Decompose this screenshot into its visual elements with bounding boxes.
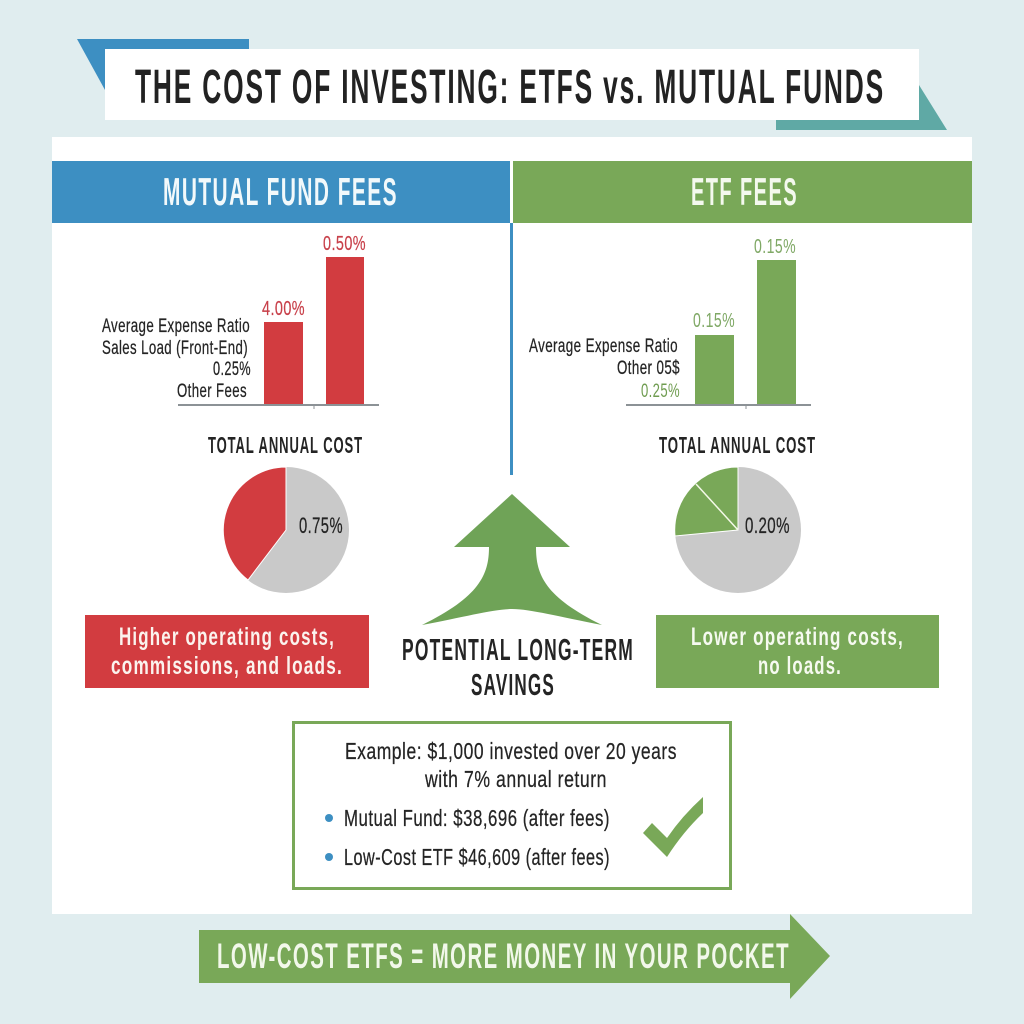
panel: etf fees column	[513, 161, 972, 688]
text: potential long-term savings: POTENTIAL LONG-TERM	[402, 632, 634, 667]
heading: etf fees: ETF FEES	[691, 171, 798, 214]
bottom arrow banner	[199, 914, 830, 999]
bar chart: mutual fund: Sales Load (Front-End)	[102, 338, 248, 359]
panel: example	[294, 722, 730, 888]
bar chart: etf: 0.15%	[754, 236, 796, 258]
pie chart: etf	[675, 467, 801, 593]
panel: example: with 7% annual return	[424, 766, 607, 792]
bar chart: etf: Average Expense Ratio	[529, 336, 678, 357]
text: potential long-term savings: SAVINGS	[471, 667, 555, 702]
callout: lower costs: no loads.	[758, 652, 842, 680]
heading: total annual cost mutual fund: TOTAL ANNUAL COST	[208, 432, 363, 458]
text: potential long-term savings	[402, 632, 634, 702]
bullet: low-cost etf: Low-Cost ETF $46,609 (after fees)	[344, 844, 610, 870]
heading: etf fees	[513, 161, 972, 223]
bar chart: mutual fund: 4.00%	[262, 298, 305, 320]
callout: higher costs: commissions, and loads.	[111, 652, 343, 680]
heading: mutual fund fees: MUTUAL FUND FEES	[163, 171, 398, 214]
panel: mutual fund fees column	[52, 161, 510, 688]
icon: savings arrow	[422, 494, 602, 625]
pie chart: etf: 0.20%	[745, 513, 790, 538]
callout: higher costs	[85, 615, 369, 688]
bar chart: mutual fund: Average Expense Ratio	[102, 316, 250, 337]
bar chart: mutual fund: 0.50%	[323, 233, 366, 255]
bullet: low-cost etf	[325, 844, 610, 870]
panel: example: Example: $1,000 invested over 20 years	[345, 738, 677, 764]
heading: mutual fund fees	[52, 161, 510, 223]
bar chart: mutual fund: 0.25%	[213, 359, 251, 380]
bar chart: mutual fund: Other Fees	[177, 381, 247, 402]
pie chart: mutual fund	[223, 467, 349, 593]
bullet: mutual fund	[325, 805, 610, 831]
callout: lower costs: Lower operating costs,	[691, 623, 904, 651]
bar chart: mutual fund	[102, 233, 379, 409]
heading: total annual cost etf: TOTAL ANNUAL COST	[659, 432, 816, 458]
callout: lower costs	[656, 615, 939, 688]
main white panel	[52, 137, 972, 914]
bar chart: etf: 0.15%	[693, 310, 735, 332]
bar chart: etf: Other 05$	[617, 358, 680, 379]
title banner	[77, 39, 947, 130]
pie chart: mutual fund: 0.75%	[299, 513, 343, 538]
bar chart: etf	[529, 236, 811, 409]
callout: higher costs: Higher operating costs,	[119, 623, 335, 651]
bullet: mutual fund: Mutual Fund: $38,696 (after fees)	[344, 805, 610, 831]
icon: checkmark	[643, 797, 703, 857]
bar chart: etf: 0.25%	[641, 381, 680, 402]
